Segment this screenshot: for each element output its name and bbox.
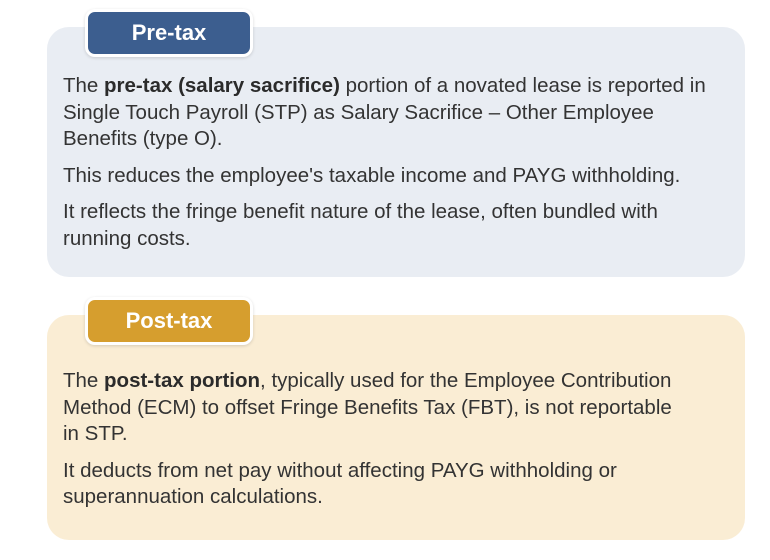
text block: post-tax [63,369,672,508]
text block: pre-tax: running costs. [63,226,191,250]
text block: pre-tax: It reflects the fringe benefit nature of the lease, often bundled with [63,200,658,223]
text block: pre-tax: Single Touch Payroll (STP) as Salary Sacrifice – Other Employee [63,100,654,124]
text block: post-tax: It deducts from net pay without affecting PAYG withholding or [63,458,617,482]
text block: post-tax: superannuation calculations. [63,485,323,508]
panel: post-tax [47,315,745,540]
badge: Post-tax: Post-tax [126,308,212,333]
text block: pre-tax [63,74,706,250]
badge: Pre-tax: Pre-tax [132,20,206,45]
badge: Post-tax [85,297,253,345]
text block: pre-tax: The pre-tax (salary sacrifice) portion of a novated lease is reported in [63,74,706,97]
text block: post-tax: Method (ECM) to offset Fringe Benefits Tax (FBT), is not reportable [63,396,672,418]
badge: Pre-tax [85,9,253,57]
text block: post-tax: in STP. [63,422,128,445]
text block: pre-tax: Benefits (type O). [63,127,223,150]
text block: pre-tax: This reduces the employee's taxable income and PAYG withholding. [63,164,680,186]
text block: post-tax: The post-tax portion, typically used for the Employee Contribution [63,369,671,392]
panel: pre-tax [47,27,745,277]
